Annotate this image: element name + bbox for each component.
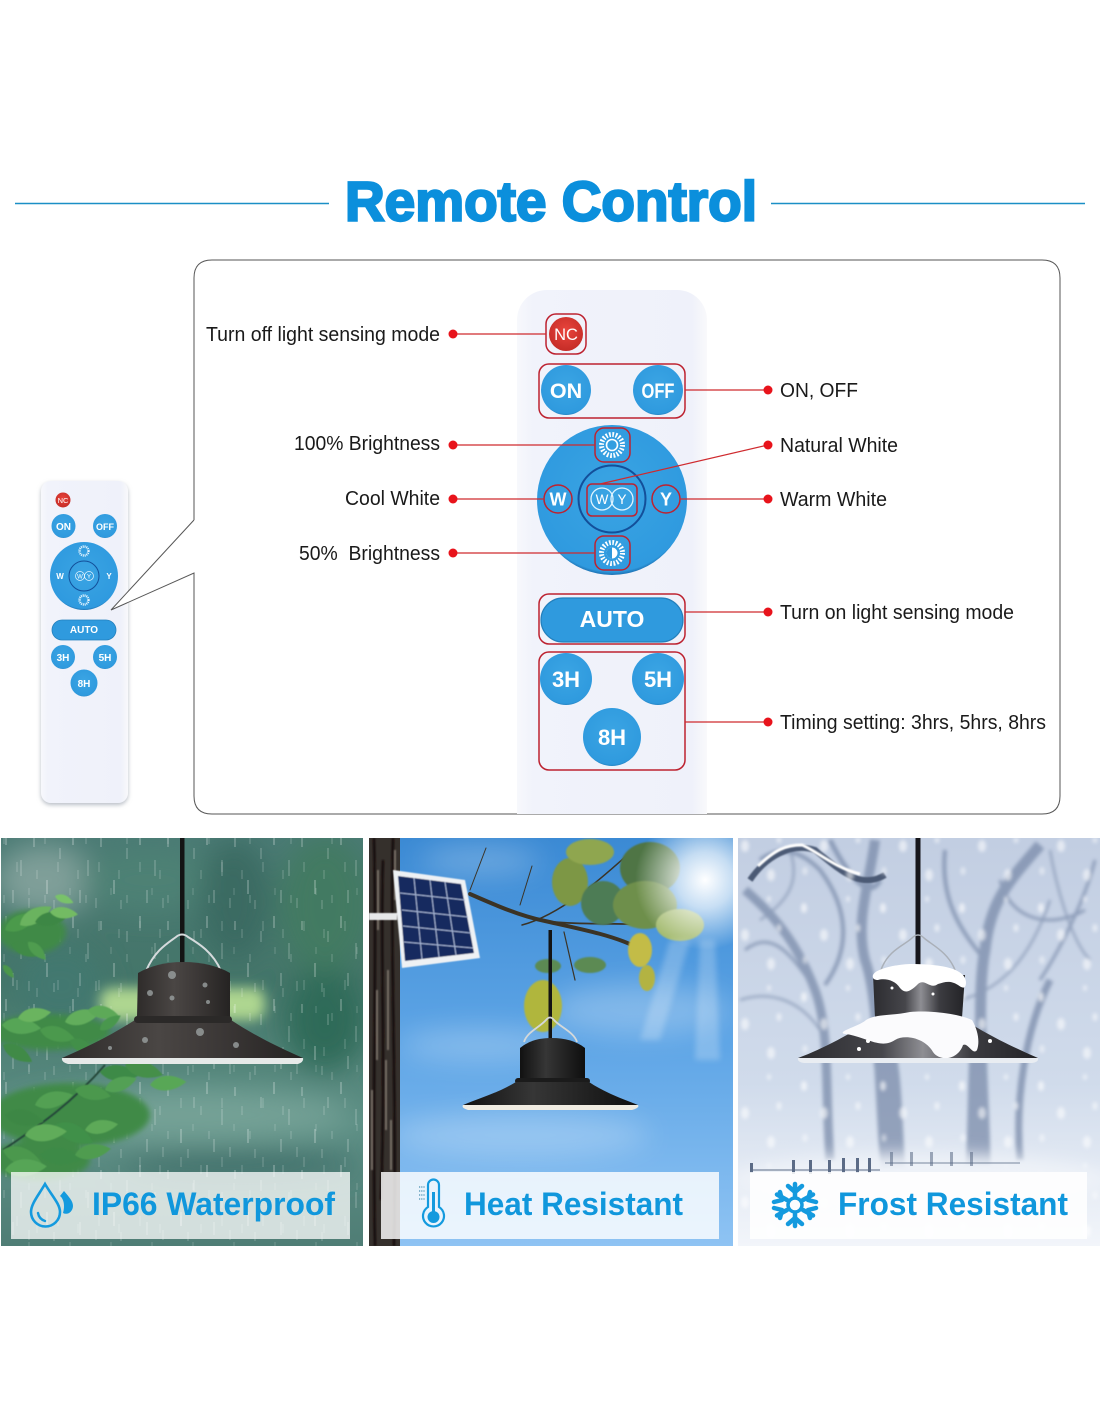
- small button: 5H: [93, 645, 117, 669]
- solar panel: [369, 870, 480, 968]
- title rule: left: [15, 202, 329, 204]
- label band: [11, 1172, 350, 1239]
- label: 100% Brightness: 100% Brightness: [294, 433, 440, 455]
- heading: Heat Resistant: Heat Resistant: [464, 1186, 683, 1222]
- small button: 5H: 5H: [99, 653, 111, 664]
- heading: IP66 Waterproof: IP66 Waterproof: [92, 1186, 335, 1222]
- panel: IP66 waterproof photo: [0, 835, 370, 1246]
- small control wheel: W: [77, 574, 83, 580]
- icon: WY twin circles: Y: [617, 492, 627, 507]
- button: OFF: OFF: [642, 380, 675, 403]
- icon: 50% brightness sun: [602, 542, 622, 564]
- label: 50% Brightness: 50% Brightness: [299, 543, 440, 565]
- panel: frost resistant photo: [730, 838, 1100, 1246]
- button: 5H: 5H: [644, 667, 672, 692]
- label: Natural White: Natural White: [780, 435, 898, 457]
- sky background: [369, 838, 733, 1246]
- small button: 8H: [70, 670, 98, 696]
- sun rays: [640, 940, 720, 1060]
- button: AUTO: AUTO: [580, 606, 644, 632]
- button: ON: [541, 365, 591, 415]
- icon: snowflake: [774, 1184, 816, 1226]
- leaves: [524, 839, 704, 1032]
- icon: thermometer: [419, 1180, 444, 1226]
- title: Remote Control: Remote Control: [345, 170, 757, 232]
- label band: [381, 1172, 719, 1239]
- label: Cool White: Cool White: [345, 488, 440, 510]
- label: Turn on light sensing mode: Turn on light sensing mode: [780, 602, 1014, 624]
- individual leaves: [0, 892, 187, 1178]
- sun glare: [638, 838, 733, 947]
- winter forest background: [730, 838, 1100, 1246]
- button: NC: [549, 317, 583, 351]
- top snowy branch: [750, 848, 885, 880]
- small remote body: [41, 481, 128, 803]
- icon: 100% brightness sun: [602, 434, 622, 456]
- button: 8H: [583, 708, 641, 766]
- foliage masses: [0, 910, 150, 1180]
- large remote: [517, 290, 707, 814]
- small control wheel: [50, 542, 118, 610]
- callout outline with pointer: [111, 260, 1060, 814]
- small control wheel: W: [56, 572, 64, 581]
- small button: NC: NC: [58, 496, 69, 505]
- small button: ON: [52, 514, 76, 538]
- branches: [468, 848, 630, 981]
- icon: WY twin circles: [591, 488, 633, 510]
- label: ON, OFF: ON, OFF: [780, 380, 858, 402]
- button: 3H: 3H: [552, 667, 580, 692]
- small control wheel: Y: [87, 574, 91, 580]
- small button: AUTO: [52, 620, 116, 640]
- small button: AUTO: AUTO: [70, 625, 98, 636]
- label: Warm White: Warm White: [780, 489, 887, 511]
- leader dots: [448, 330, 772, 726]
- panel: remote key callout: [110, 260, 1060, 814]
- remote body: [517, 290, 707, 814]
- fence: [750, 1152, 1020, 1174]
- label: Turn off light sensing mode: Turn off light sensing mode: [206, 324, 440, 346]
- button: OFF: [633, 365, 683, 415]
- title rule: right: [771, 202, 1085, 204]
- red highlight boxes: [539, 314, 685, 770]
- small button: ON: ON: [56, 522, 71, 533]
- pendant lamp, wet: [62, 838, 303, 1064]
- small control wheel: Y: [106, 572, 112, 581]
- button: 8H: 8H: [598, 725, 626, 750]
- infographic canvas: [1, 178, 1100, 1246]
- button: Y: Y: [660, 490, 672, 510]
- foliage: [0, 892, 187, 1180]
- button: NC: NC: [554, 326, 578, 344]
- control wheel: [537, 425, 687, 575]
- button: 5H: [632, 653, 684, 705]
- icon: water drops: [31, 1184, 73, 1226]
- small button: 8H: 8H: [78, 679, 90, 690]
- pendant lamp, snowy: [798, 838, 1038, 1063]
- label: Timing setting: Timing setting: 3hrs, 5hrs, 8hrs: [780, 712, 1046, 734]
- button: 3H: [540, 653, 592, 705]
- heading: Frost Resistant: Frost Resistant: [838, 1186, 1068, 1222]
- small button: OFF: [93, 514, 117, 538]
- label band: [750, 1172, 1087, 1239]
- rainy forest background: [0, 835, 370, 1246]
- small button: OFF: OFF: [96, 522, 114, 532]
- small button: NC: [56, 492, 70, 508]
- button: AUTO: [541, 598, 683, 642]
- icon: WY twin circles: W: [596, 492, 609, 507]
- leader lines: [453, 334, 768, 722]
- small button: 3H: [51, 645, 75, 669]
- panel: heat resistant photo: [369, 810, 775, 1246]
- button: ON: ON: [550, 379, 582, 403]
- small remote: [41, 481, 128, 803]
- small button: 3H: 3H: [57, 653, 69, 664]
- button: W: W: [550, 490, 566, 510]
- pendant lamp, dry: [463, 930, 638, 1110]
- tree trunk: [369, 838, 400, 1246]
